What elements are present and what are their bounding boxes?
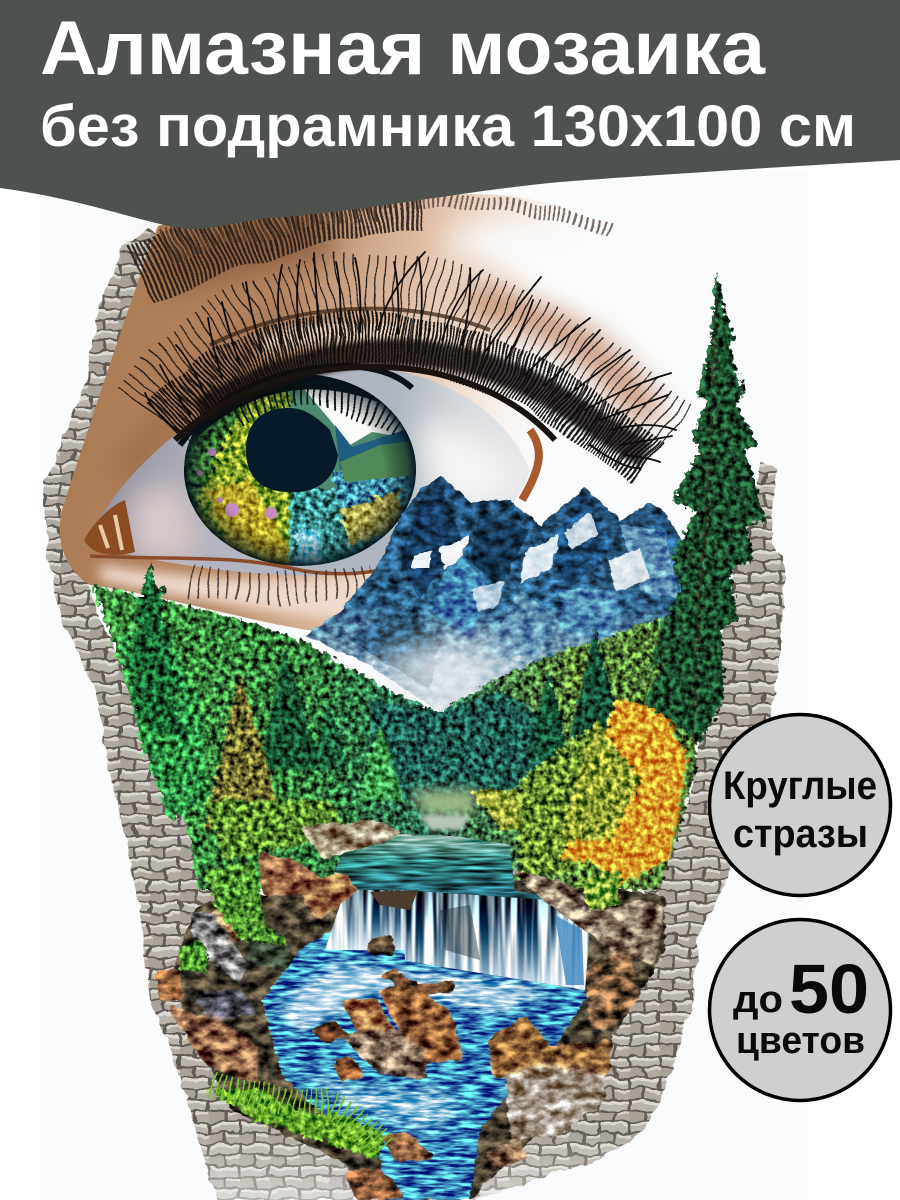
lower lashes xyxy=(190,578,372,588)
waterfall xyxy=(325,890,590,990)
lash shadow xyxy=(200,352,645,455)
small plants xyxy=(180,860,620,975)
lid edge xyxy=(175,367,555,440)
lower lid xyxy=(100,560,430,622)
reflection: meadow xyxy=(184,390,416,566)
pupil xyxy=(246,408,338,492)
bottom rocks xyxy=(380,1132,435,1162)
upper lid shadow xyxy=(180,366,412,445)
rocks xyxy=(155,850,665,1200)
yellow autumn tree xyxy=(560,700,688,885)
badge text line 1: Круглые xyxy=(723,764,877,808)
eye: eyeball xyxy=(84,367,539,588)
sclera xyxy=(85,367,530,576)
reflection: sky xyxy=(304,375,410,445)
river rocks xyxy=(378,985,465,1062)
white highlight on brow bone xyxy=(440,224,625,300)
subtitle: без подрамника 130х100 см xyxy=(40,94,856,159)
ground under river xyxy=(170,880,665,1200)
badge text line 2: стразы xyxy=(733,812,868,856)
eye: iris xyxy=(180,366,420,580)
river: lower rapids xyxy=(262,925,585,1200)
badge: round rhinestones xyxy=(710,714,890,896)
grass xyxy=(208,1085,385,1160)
flowers xyxy=(197,448,277,519)
mountains xyxy=(305,475,692,712)
individual lashes xyxy=(145,252,676,468)
lower lid line xyxy=(90,556,430,574)
eyebrow hair xyxy=(140,200,610,275)
number 50: 50 xyxy=(789,950,869,1028)
forest xyxy=(92,560,700,890)
lid shadow xyxy=(120,235,650,480)
label: colours: цветов xyxy=(736,1020,865,1062)
caruncle xyxy=(84,500,135,555)
river: far shore and rapids xyxy=(300,815,470,860)
far forest xyxy=(370,690,550,800)
river: lake xyxy=(325,835,560,900)
valley haze xyxy=(370,640,520,710)
lid highlight xyxy=(260,331,480,350)
eye: skin and brow xyxy=(60,194,670,632)
small left fir xyxy=(124,560,190,740)
long lash tips xyxy=(155,300,665,445)
left bank rocks xyxy=(166,1005,258,1085)
forest clearing xyxy=(410,790,480,815)
brick wall: right edge xyxy=(470,460,786,1200)
header band xyxy=(0,0,900,229)
outer corner line xyxy=(522,430,539,500)
big right fir tree xyxy=(645,272,766,745)
right bank rocks xyxy=(508,868,665,965)
skin xyxy=(60,194,670,632)
snow patches xyxy=(438,535,470,570)
eye: eyelashes xyxy=(145,252,676,468)
peak facets xyxy=(350,478,680,690)
driftwood xyxy=(487,1015,612,1080)
crease xyxy=(210,309,490,345)
trees xyxy=(120,620,620,880)
badge: up to 50 colours xyxy=(710,920,890,1100)
label: up to: до xyxy=(733,979,783,1021)
title: Алмазная мозаика xyxy=(40,6,766,91)
wall fade at bottom xyxy=(200,1130,660,1200)
brick wall: left edge xyxy=(42,228,352,1200)
reflected lashes xyxy=(235,388,405,425)
dense lash band xyxy=(165,338,648,462)
